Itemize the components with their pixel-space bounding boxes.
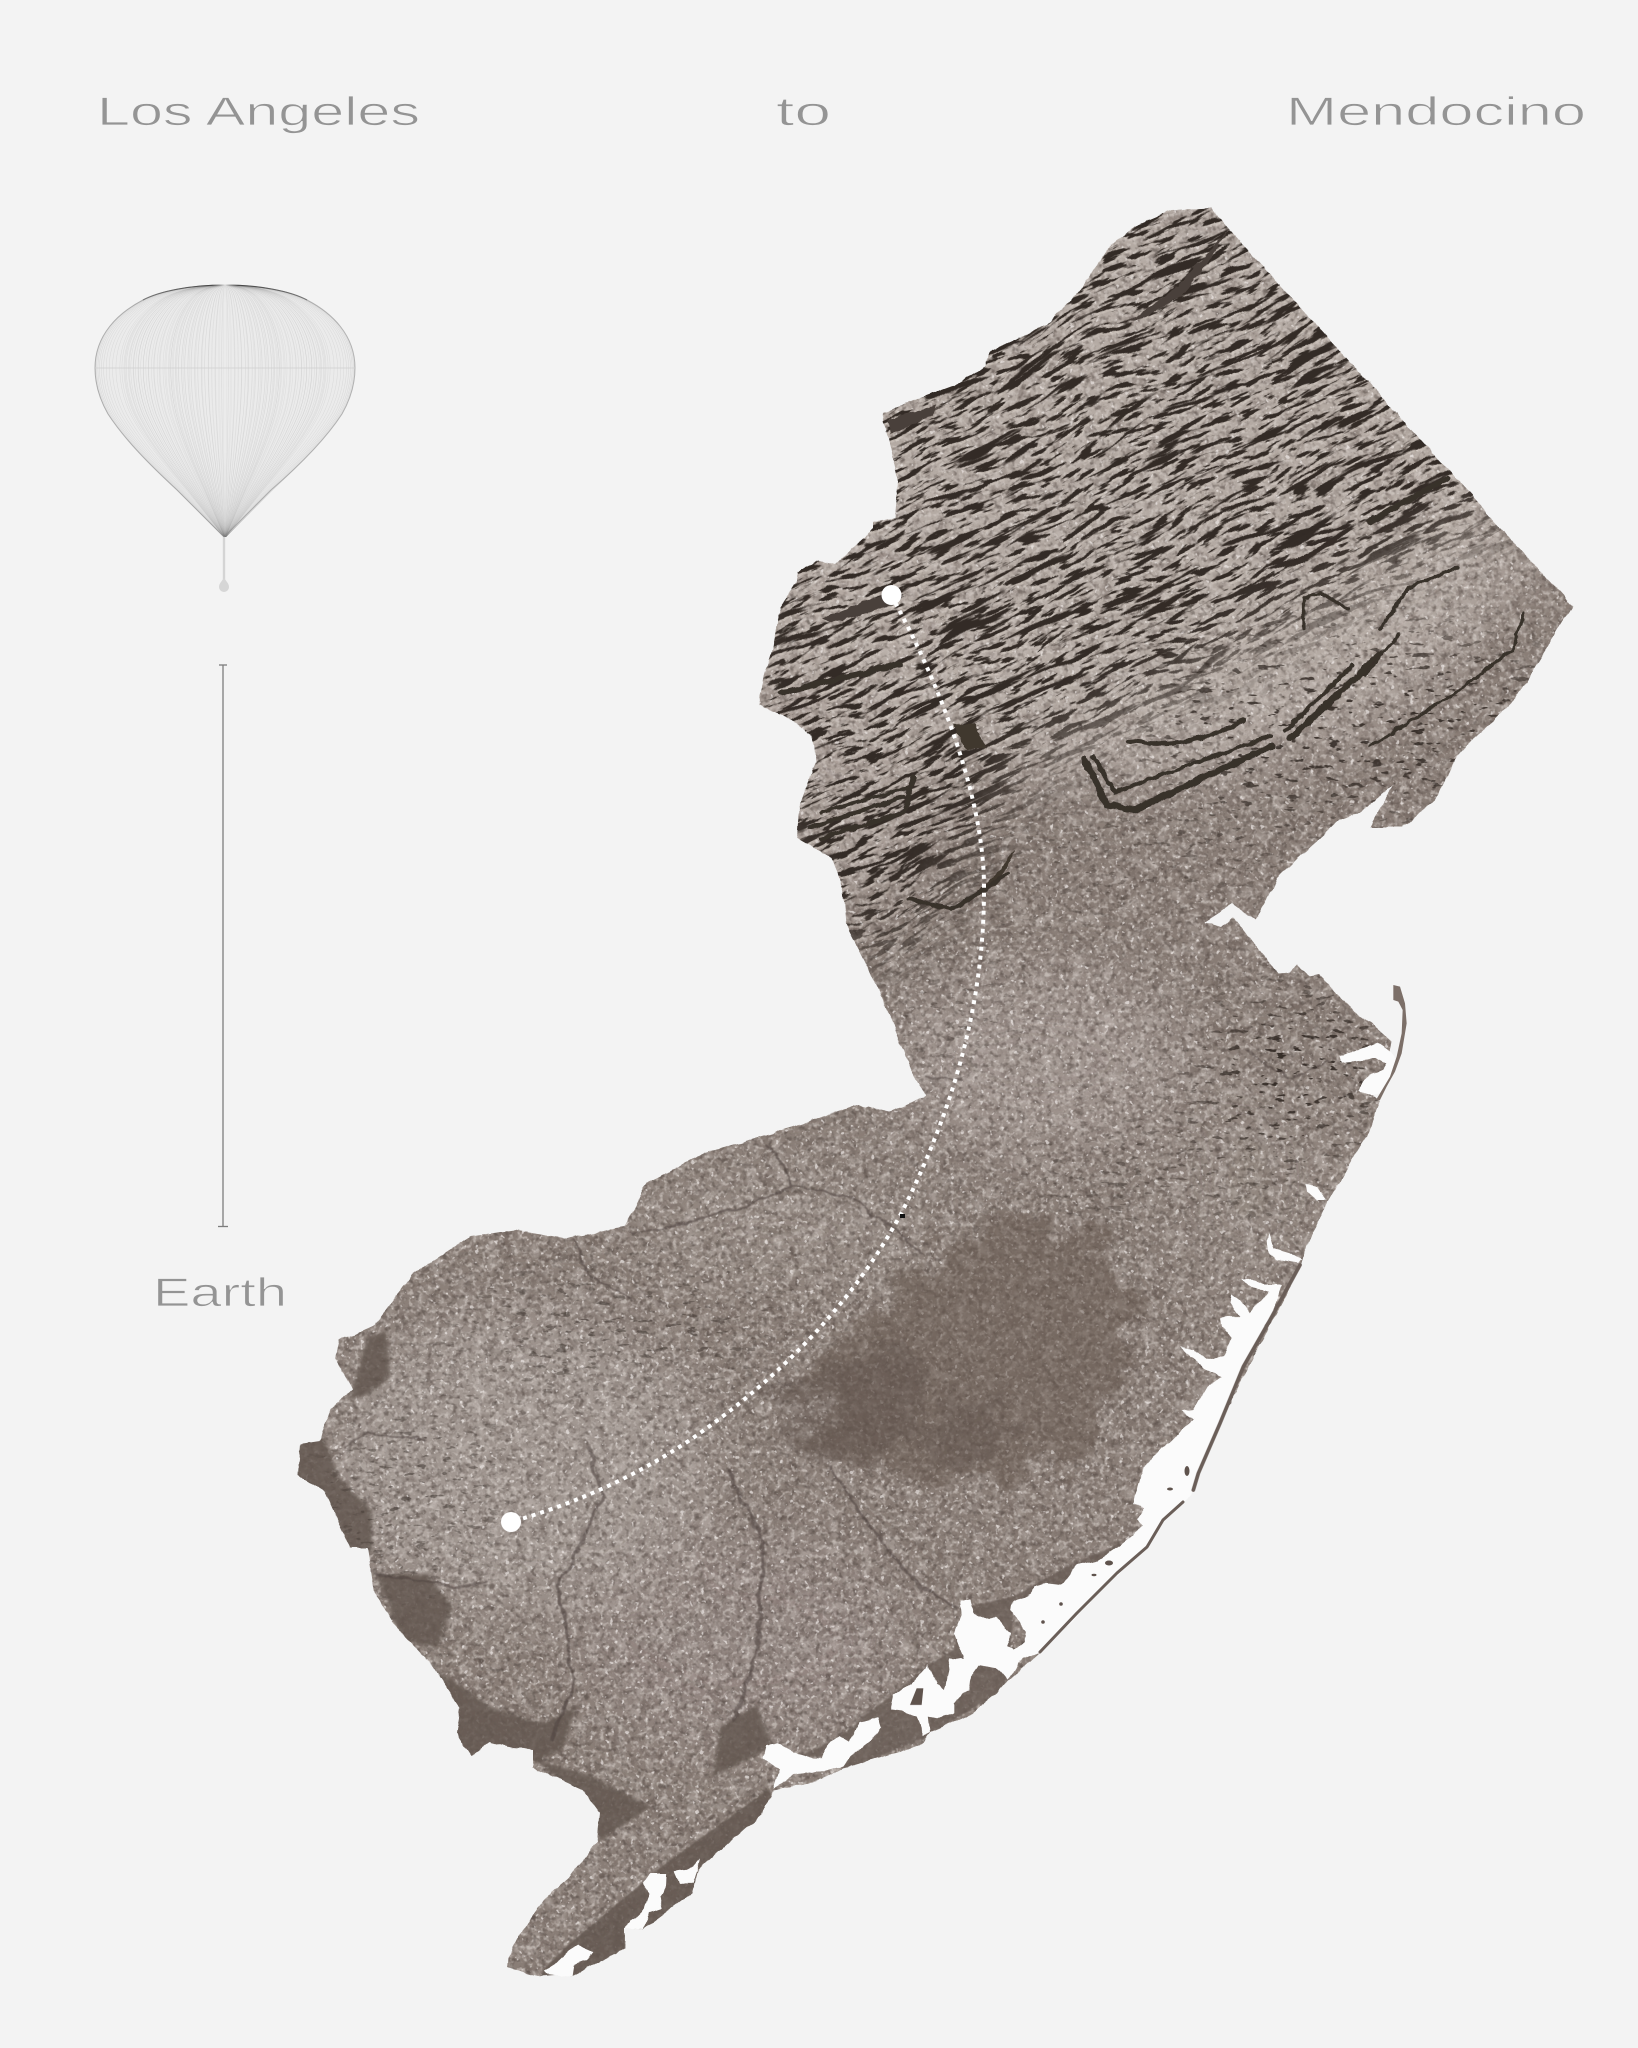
scale bar: vertical altitude line <box>218 665 228 1227</box>
barrier island: long beach <box>1040 1502 1183 1652</box>
title: Mendocino: Mendocino <box>1286 90 1586 134</box>
balloon equator line <box>95 367 355 369</box>
sandy hook spit <box>1376 985 1407 1100</box>
southern tip dark strip <box>540 1788 773 1980</box>
route: dotted arc <box>511 595 984 1522</box>
map: terrain relief of the route <box>298 208 1574 1976</box>
title row: Los Angeles to Mendocino <box>97 90 1586 134</box>
bay: southern tip c <box>543 1945 593 1977</box>
texture: bright glints <box>250 180 1600 2000</box>
scattered dark pits <box>250 180 1600 2000</box>
balloon gores <box>95 285 354 537</box>
southeast coastal dark band <box>797 1543 1133 1770</box>
texture: coarse dark mottling <box>322 210 1560 1976</box>
small marsh islands in the bays <box>910 1466 1190 1705</box>
ridges: short relief strokes <box>58 0 1638 1568</box>
light areas <box>330 180 1540 1750</box>
texture: fine dark speckle <box>250 180 1600 2000</box>
barrier island: central <box>1193 1265 1300 1490</box>
route end dot: Los Angeles <box>501 1512 521 1532</box>
balloon payload <box>219 578 229 592</box>
title: Los Angeles: Los Angeles <box>97 90 420 134</box>
route start dot: Mendocino <box>882 585 902 605</box>
balloon payload line <box>223 537 225 582</box>
bay: southern tip a <box>625 1874 667 1930</box>
texture: coarse light mottling <box>325 210 1573 1976</box>
bay: southern tip b <box>675 1857 700 1883</box>
western bay shoreline dark shapes <box>295 1332 773 1842</box>
balloon outline <box>95 285 355 537</box>
northern fold ridges <box>52 0 1638 1575</box>
terrain base <box>250 180 1600 2000</box>
icon: high-altitude balloon <box>95 285 355 592</box>
inlet: middle <box>1267 1233 1302 1263</box>
title: to: to <box>776 90 831 134</box>
bay: great bay <box>890 1548 1120 1737</box>
bay: barnegat connector <box>1077 1467 1195 1575</box>
bay: central barnegat <box>1133 1278 1282 1503</box>
route marker tick <box>900 1214 905 1218</box>
rivers and streams of the southern plain <box>346 1051 1329 1740</box>
balloon top rim <box>143 285 307 300</box>
texture: fine light speckle <box>250 180 1600 2000</box>
inlet: upper <box>1305 1183 1327 1200</box>
bay: little egg <box>763 1717 882 1788</box>
bay: shrewsbury <box>1340 1043 1396 1096</box>
coastal bays and inlets <box>543 1043 1396 1977</box>
barrier islands <box>1040 1265 1300 1652</box>
hand-drawn major ridges and lakes <box>783 231 1523 910</box>
Pine forest dark zone <box>757 1217 1138 1485</box>
ridges: long relief strokes <box>52 0 1638 1575</box>
balloon envelope <box>95 285 355 537</box>
label: Earth: Earth <box>153 1271 287 1315</box>
